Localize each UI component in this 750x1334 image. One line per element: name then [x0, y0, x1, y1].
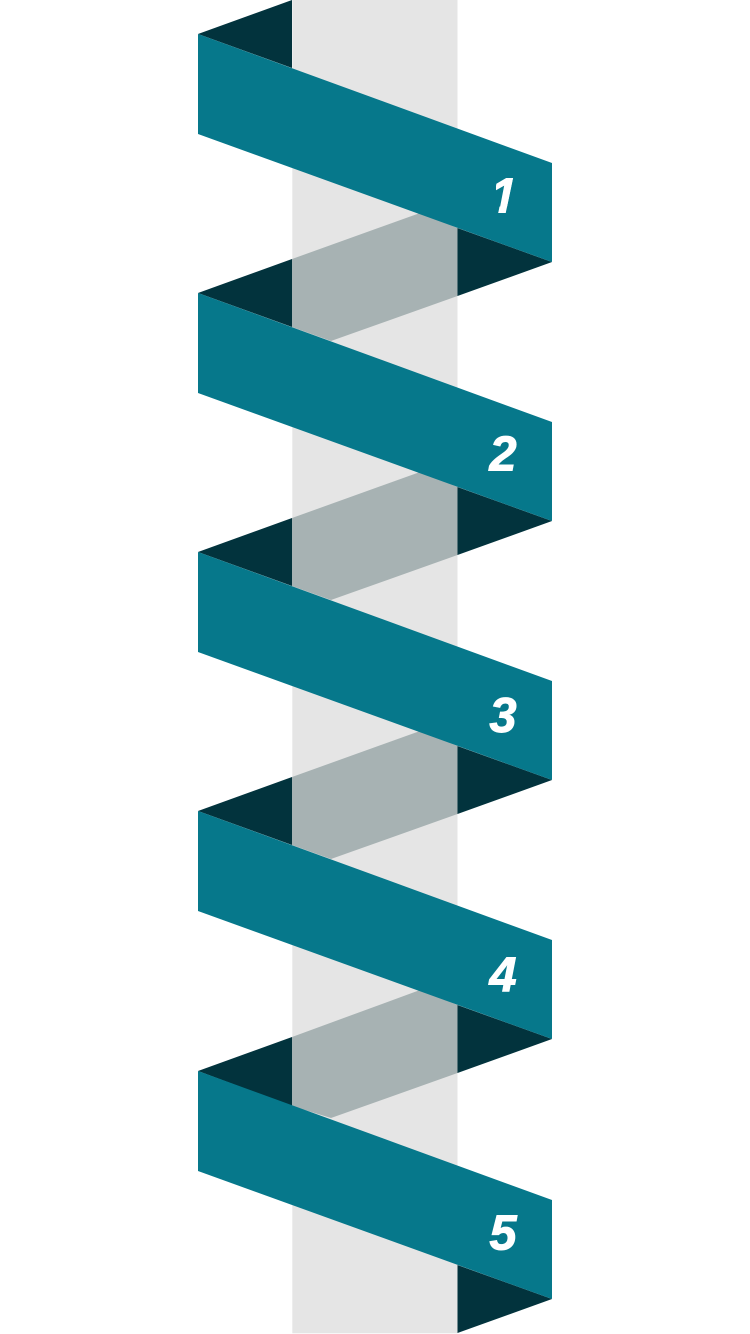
fold connector 1 to 2 — [292, 213, 458, 341]
number 1: 1 — [490, 170, 518, 224]
ribbon 2 — [198, 259, 552, 555]
ribbon 1 band — [198, 34, 552, 262]
ribbon 4 — [198, 777, 552, 1073]
ribbon 3 — [198, 518, 552, 814]
ribbon 1 right fold — [458, 228, 552, 296]
number 3: 3 — [489, 689, 517, 743]
ribbon 4 left fold — [198, 777, 292, 845]
ribbon 2 band — [198, 293, 552, 521]
ribbon 1 top-left fold — [198, 0, 292, 68]
fold connector 3 to 4 — [292, 731, 458, 859]
ribbon 2 left fold — [198, 259, 292, 327]
background vertical column — [292, 0, 458, 1333]
ribbon 2 right fold — [458, 487, 552, 555]
number 4: 4 — [488, 948, 517, 1002]
ribbon 3 left fold — [198, 518, 292, 586]
fold connector 4 to 5 — [292, 990, 458, 1118]
zigzag ribbon infographic — [198, 0, 552, 1334]
ribbon 5 right fold — [458, 1265, 552, 1333]
ribbon 5 band — [198, 1071, 552, 1299]
ribbon 4 band — [198, 811, 552, 1039]
ribbon 5 — [198, 1037, 552, 1333]
ribbon 3 right fold — [458, 746, 552, 814]
ribbon 1 — [198, 0, 552, 296]
ribbon 3 band — [198, 552, 552, 780]
number 2: 2 — [488, 428, 517, 482]
ribbon 4 right fold — [458, 1005, 552, 1073]
ribbon 5 left fold — [198, 1037, 292, 1106]
fold connector 2 to 3 — [292, 472, 458, 600]
number 5: 5 — [489, 1206, 517, 1260]
